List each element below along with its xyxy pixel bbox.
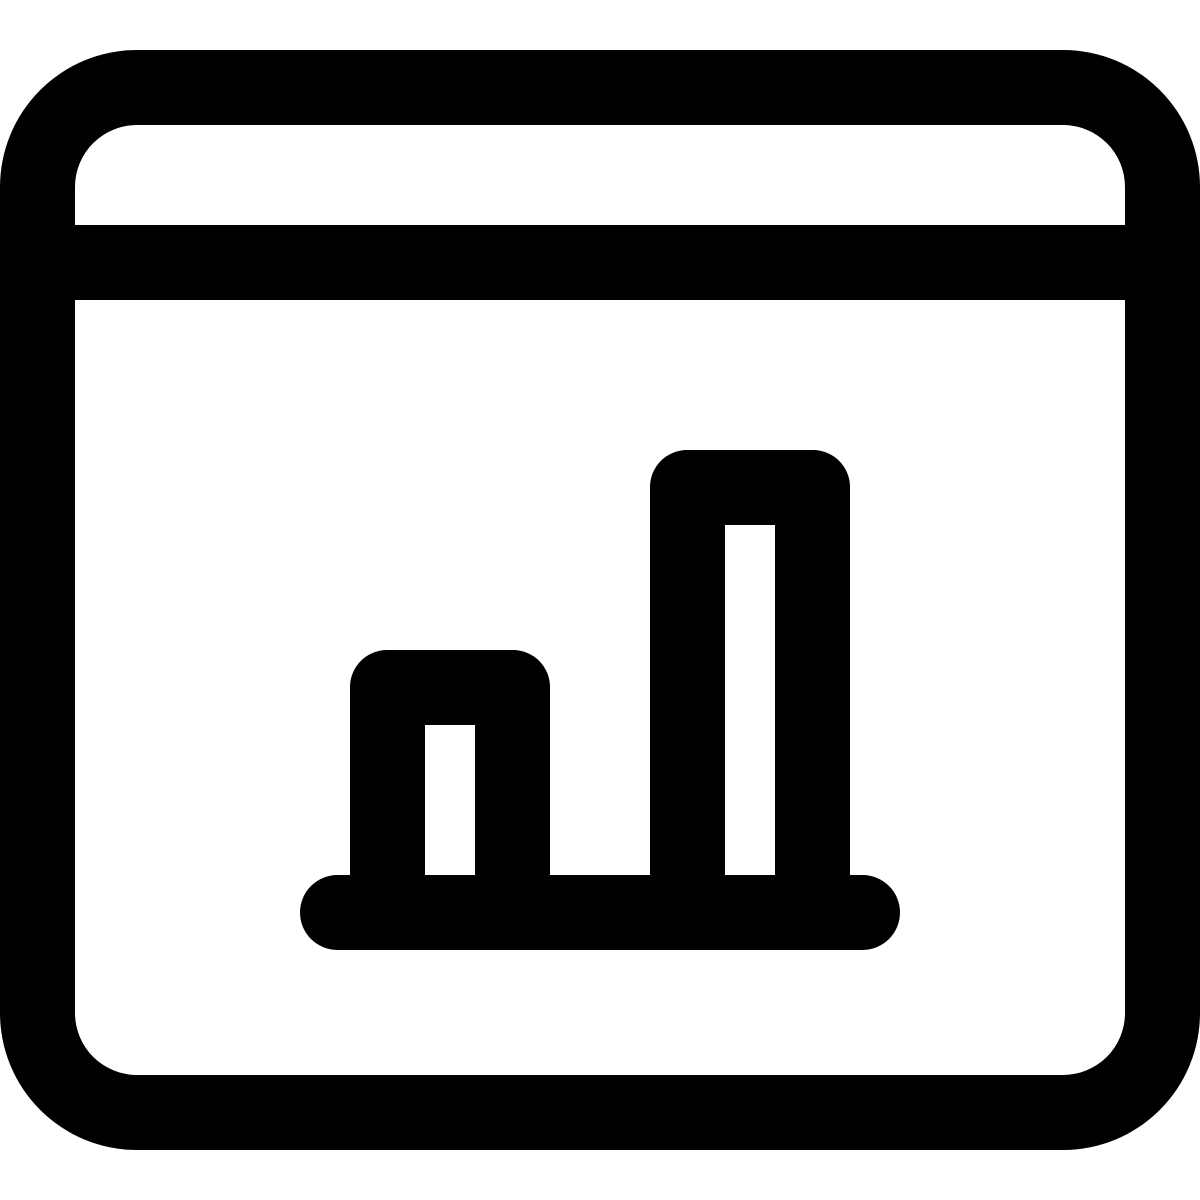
icon: bar chart: [300, 450, 900, 950]
